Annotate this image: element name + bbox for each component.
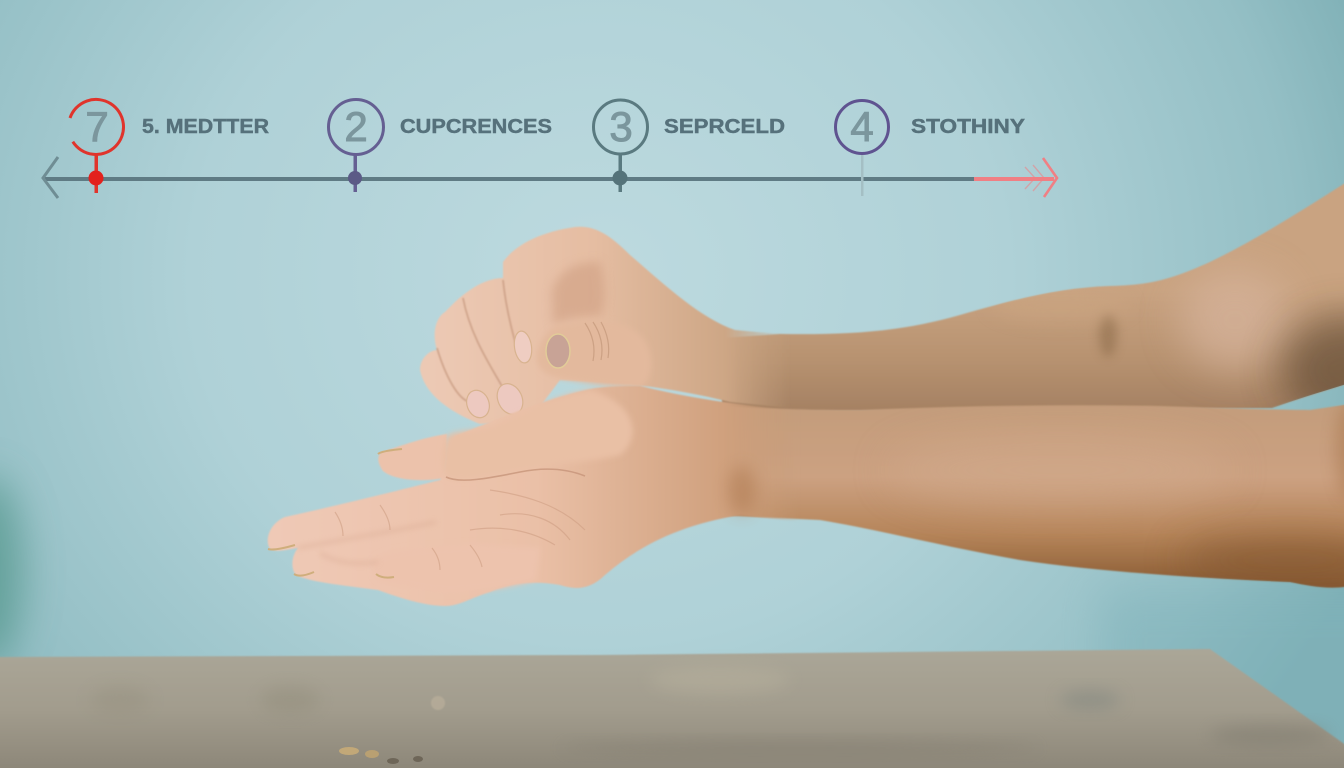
palm with fingers xyxy=(268,386,800,606)
fingernail tips xyxy=(268,449,402,578)
step 3 marker: 3 xyxy=(609,103,633,150)
thumb knuckle creases xyxy=(585,322,609,361)
wooden table xyxy=(0,649,1344,768)
lower thumb xyxy=(442,390,632,480)
gaps between fingers xyxy=(298,522,436,563)
upper hand back xyxy=(420,227,790,424)
step 2 marker: 2 xyxy=(344,103,368,150)
arrow: right xyxy=(1025,158,1057,197)
upper arm and hand xyxy=(420,180,1344,425)
upper thumb xyxy=(537,321,651,388)
step 4 marker xyxy=(836,100,888,196)
step 1 label: 5. MEDTTER xyxy=(142,116,270,138)
lower arm and open palm xyxy=(268,386,1344,606)
step 4 marker: 4 xyxy=(850,103,874,150)
step 2 marker xyxy=(328,100,384,192)
upper arm xyxy=(722,180,1344,425)
lower forearm xyxy=(722,404,1344,588)
step 4 label: STOTHINY xyxy=(911,116,1026,138)
third fingertip xyxy=(373,544,540,593)
palm lines xyxy=(335,490,585,570)
back finger xyxy=(378,434,447,480)
thumb outline shadow xyxy=(446,469,585,480)
arrow: left xyxy=(43,157,58,198)
gap between index finger and thumb xyxy=(552,262,604,325)
wrist shadow xyxy=(728,466,756,514)
forearm shading xyxy=(985,405,1344,588)
timeline axis xyxy=(45,177,1054,181)
step 3 label: SEPRCELD xyxy=(664,116,785,138)
nails upper hand xyxy=(463,330,570,421)
finger separation lines xyxy=(437,280,522,402)
step 1 marker: 7 xyxy=(85,103,109,150)
step 2 label: CUPCRENCES xyxy=(400,116,552,138)
step 1 marker xyxy=(70,99,124,193)
step 3 marker xyxy=(594,100,648,192)
timeline xyxy=(43,99,1057,198)
wood crumbs xyxy=(339,696,445,764)
